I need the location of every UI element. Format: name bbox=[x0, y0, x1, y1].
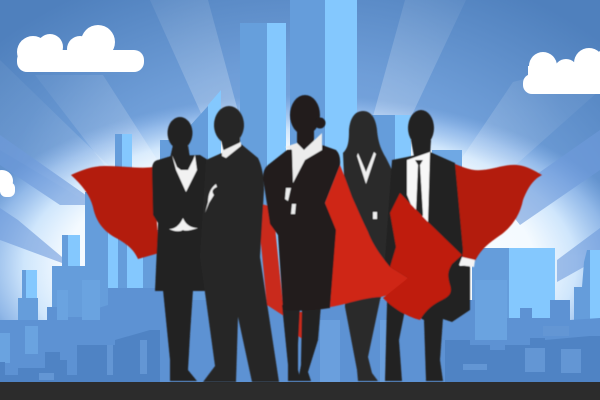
darker sky bands bbox=[0, 130, 600, 282]
figure: man left bbox=[200, 106, 279, 382]
cloud: small left edge bbox=[0, 170, 15, 197]
shirt: woman centre bbox=[285, 133, 322, 214]
shirt: woman left bbox=[169, 155, 198, 231]
briefcase bbox=[425, 265, 470, 322]
cape: centre front bbox=[325, 165, 408, 307]
skyline: front buildings bbox=[0, 280, 600, 382]
figure: man right bbox=[385, 110, 463, 381]
ground bbox=[0, 382, 600, 400]
shirt: woman long hair bbox=[357, 152, 377, 219]
cloud: upper right bbox=[523, 47, 600, 94]
figure: woman left bbox=[152, 117, 210, 381]
figure: woman centre rear legs bbox=[282, 305, 321, 381]
cape: lower piece bbox=[296, 312, 306, 341]
cloud: upper left bbox=[17, 25, 144, 72]
figure: woman long hair bbox=[343, 111, 402, 381]
cape: far right bbox=[455, 164, 542, 261]
figures and capes bbox=[71, 95, 542, 382]
shirt and cuff: man left bbox=[205, 142, 241, 213]
cape: right front bbox=[383, 193, 462, 320]
shirt cuff: man right bbox=[459, 257, 475, 267]
cape: far left bbox=[71, 166, 159, 259]
sun rays bbox=[0, 0, 600, 250]
shirt and tie: man right bbox=[407, 152, 430, 222]
figure: woman centre bbox=[263, 95, 340, 311]
cape: behind centre figures bbox=[257, 203, 284, 316]
